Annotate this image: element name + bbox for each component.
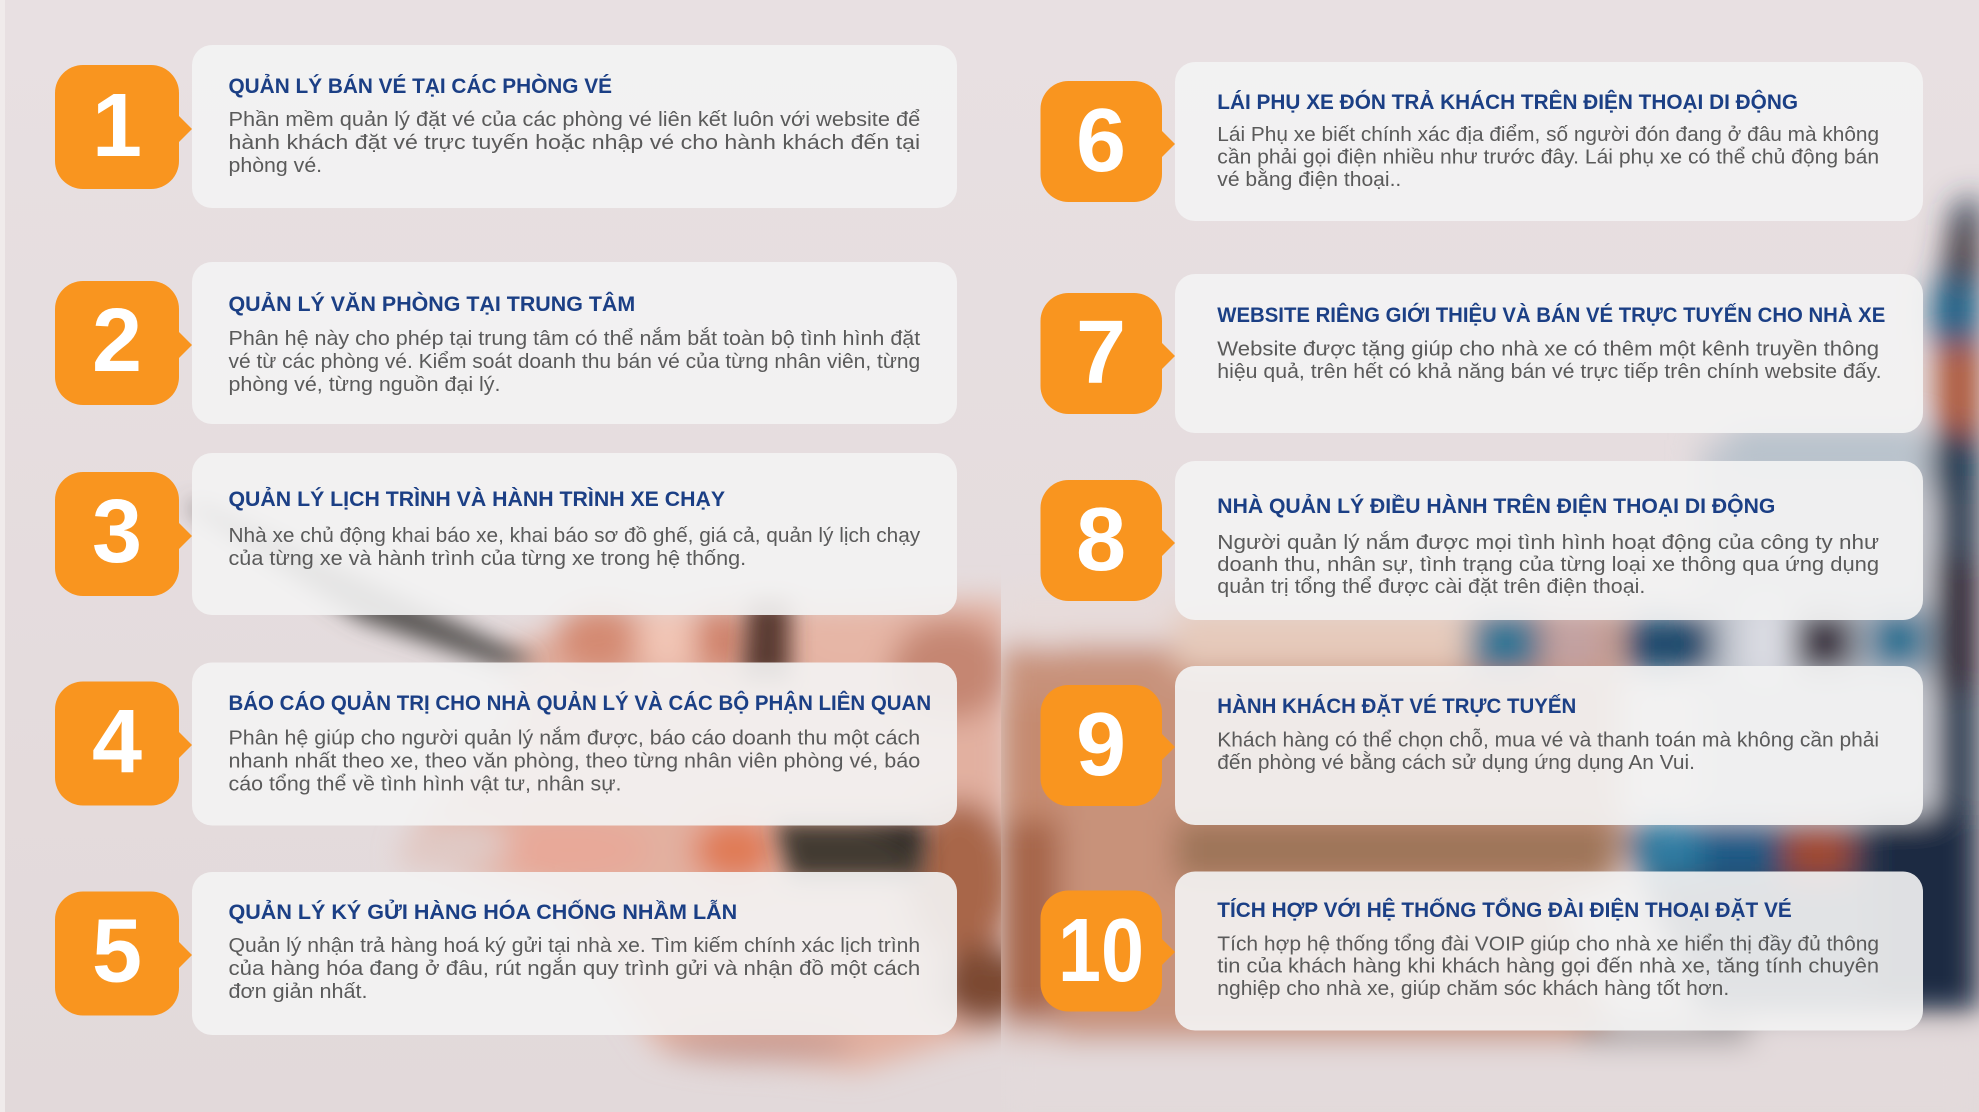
- heading 2: QUẢN LÝ VĂN PHÒNG TẠI TRUNG TÂM: [228, 291, 635, 316]
- number badge 1: 1: [92, 76, 142, 176]
- card background 3: [192, 453, 957, 615]
- body text 3: của từng xe và hành trình của từng xe trong hệ thống.: [228, 548, 746, 570]
- body text 5: đơn giản nhất.: [228, 981, 368, 1003]
- body text 4: cáo tổng thể về tình hình vật tư, nhân sự.: [228, 774, 622, 796]
- body text 8: quản trị tổng thể được cài đặt trên điện thoại.: [1217, 576, 1645, 598]
- number badge 5: 5: [92, 902, 142, 1002]
- panel 8: nhà quản lý điều hành: [1040, 461, 1923, 620]
- panel 6: lái phụ xe: [1040, 62, 1923, 221]
- body text 10: tin của khách hàng khi khách hàng gọi đến nhà xe, tăng tính chuyên: [1217, 956, 1879, 978]
- number badge 10: [1040, 890, 1175, 1012]
- number badge 9: [1040, 685, 1175, 806]
- number badge 8: 8: [1076, 490, 1126, 590]
- card background 8: [1175, 461, 1923, 620]
- body text 6: [1217, 124, 1879, 191]
- body text 9: [1217, 728, 1879, 774]
- body text 2: Phân hệ này cho phép tại trung tâm có thể nắm bắt toàn bộ tình hình đặt: [228, 327, 921, 350]
- number badge 4: 4: [92, 692, 142, 792]
- panel 2: văn phòng tại trung tâm: [55, 262, 957, 424]
- number badge 2: 2: [92, 291, 142, 391]
- heading 1: QUẢN LÝ BÁN VÉ TẠI CÁC PHÒNG VÉ: [228, 73, 612, 98]
- body text 2: phòng vé, từng nguồn đại lý.: [228, 374, 500, 396]
- body text 6: vé bằng điện thoại..: [1217, 168, 1401, 191]
- panel 7: website riêng: [1040, 274, 1923, 433]
- body text 3: [228, 525, 920, 570]
- card background 5: [192, 872, 957, 1035]
- number badge 6: [1040, 81, 1175, 202]
- body text 7: Website được tặng giúp cho nhà xe có thêm một kênh truyền thông: [1217, 338, 1879, 360]
- body text 7: [1217, 338, 1882, 383]
- panel 5: ký gửi hàng hóa: [55, 872, 957, 1035]
- heading 8: NHÀ QUẢN LÝ ĐIỀU HÀNH TRÊN ĐIỆN THOẠI DI ĐỘNG: [1217, 493, 1775, 518]
- card background 9: [1175, 666, 1923, 825]
- heading 3: QUẢN LÝ LỊCH TRÌNH VÀ HÀNH TRÌNH XE CHẠY: [228, 486, 725, 511]
- heading 5: QUẢN LÝ KÝ GỬI HÀNG HÓA CHỐNG NHẦM LẪN: [228, 898, 737, 924]
- body text 5: [228, 935, 920, 1003]
- heading 4: BÁO CÁO QUẢN TRỊ CHO NHÀ QUẢN LÝ VÀ CÁC BỘ PHẬN LIÊN QUAN: [228, 690, 931, 715]
- body text 8: [1217, 531, 1879, 598]
- body text 4: Phân hệ giúp cho người quản lý nắm được, báo cáo doanh thu một cách: [228, 726, 920, 750]
- card background 2: [192, 262, 957, 424]
- panel 3: lịch trình và hành trình: [55, 453, 957, 615]
- number badge 6: 6: [1076, 91, 1126, 191]
- number badge 3: [55, 472, 192, 596]
- body text 9: Khách hàng có thể chọn chỗ, mua vé và thanh toán mà không cần phải: [1217, 728, 1879, 752]
- panel 4: báo cáo quản trị: [55, 662, 957, 826]
- card background 7: [1175, 274, 1923, 433]
- card background 6: [1175, 62, 1923, 221]
- panel 9: hành khách đặt vé: [1040, 666, 1923, 825]
- card background 1: [192, 45, 957, 208]
- body text 1: hành khách đặt vé trực tuyến hoặc nhập vé cho hành khách đến tại: [228, 132, 920, 154]
- number badge 4: [55, 682, 192, 806]
- body text 10: nghiệp cho nhà xe, giúp chăm sóc khách hàng tốt hơn.: [1217, 978, 1729, 1000]
- body text 8: doanh thu, nhân sự, tình trạng của từng loại xe thông qua ứng dụng: [1217, 554, 1879, 576]
- card background 4: [192, 662, 957, 826]
- body text 2: vé từ các phòng vé. Kiểm soát doanh thu bán vé của từng nhân viên, từng: [228, 351, 920, 373]
- number badge 3: 3: [92, 482, 142, 582]
- heading 9: HÀNH KHÁCH ĐẶT VÉ TRỰC TUYẾN: [1217, 693, 1576, 718]
- body text 4: [228, 726, 920, 796]
- body text 5: Quản lý nhận trả hàng hoá ký gửi tại nhà xe. Tìm kiếm chính xác lịch trình: [228, 935, 920, 957]
- body text 2: [228, 327, 921, 396]
- body text 5: của hàng hóa đang ở đâu, rút ngắn quy trình gửi và nhận đồ một cách: [228, 957, 920, 980]
- panel 10: tích hợp tổng đài: [1040, 872, 1923, 1030]
- body text 3: Nhà xe chủ động khai báo xe, khai báo sơ đồ ghế, giá cả, quản lý lịch chạy: [228, 525, 920, 547]
- number badge 8: [1040, 480, 1175, 601]
- panel 1: bán vé tại phòng vé: [55, 45, 957, 208]
- card background 10: [1175, 872, 1923, 1030]
- body text 10: [1217, 934, 1879, 1000]
- body text 1: Phần mềm quản lý đặt vé của các phòng vé liên kết luôn với website để: [228, 109, 920, 131]
- heading 6: LÁI PHỤ XE ĐÓN TRẢ KHÁCH TRÊN ĐIỆN THOẠI DI ĐỘNG: [1217, 89, 1798, 114]
- number badge 9: 9: [1076, 695, 1126, 795]
- number badge 7: [1040, 293, 1175, 414]
- body text 9: đến phòng vé bằng cách sử dụng ứng dụng An Vui.: [1217, 751, 1695, 774]
- body text 1: [228, 109, 920, 177]
- body text 10: Tích hợp hệ thống tổng đài VOIP giúp cho nhà xe hiển thị đầy đủ thông: [1217, 934, 1879, 956]
- body text 4: nhanh nhất theo xe, theo văn phòng, theo từng nhân viên phòng vé, báo: [228, 750, 920, 772]
- body text 7: hiệu quả, trên hết có khả năng bán vé trực tiếp trên chính website đấy.: [1217, 361, 1882, 383]
- number badge 2: [55, 281, 192, 405]
- number badge 5: [55, 892, 192, 1016]
- number badge 10: 10: [1058, 901, 1144, 1001]
- number badge 1: [55, 65, 192, 189]
- body text 8: Người quản lý nắm được mọi tình hình hoạt động của công ty như: [1217, 531, 1879, 554]
- body text 6: Lái Phụ xe biết chính xác địa điểm, số người đón đang ở đâu mà không: [1217, 124, 1879, 146]
- body text 6: cần phải gọi điện nhiều như trước đây. Lái phụ xe có thể chủ động bán: [1217, 146, 1879, 168]
- number badge 7: 7: [1076, 303, 1126, 403]
- heading 10: TÍCH HỢP VỚI HỆ THỐNG TỔNG ĐÀI ĐIỆN THOẠI ĐẶT VÉ: [1217, 896, 1792, 922]
- body text 1: phòng vé.: [228, 155, 322, 177]
- heading 7: WEBSITE RIÊNG GIỚI THIỆU VÀ BÁN VÉ TRỰC TUYẾN CHO NHÀ XE: [1217, 302, 1885, 327]
